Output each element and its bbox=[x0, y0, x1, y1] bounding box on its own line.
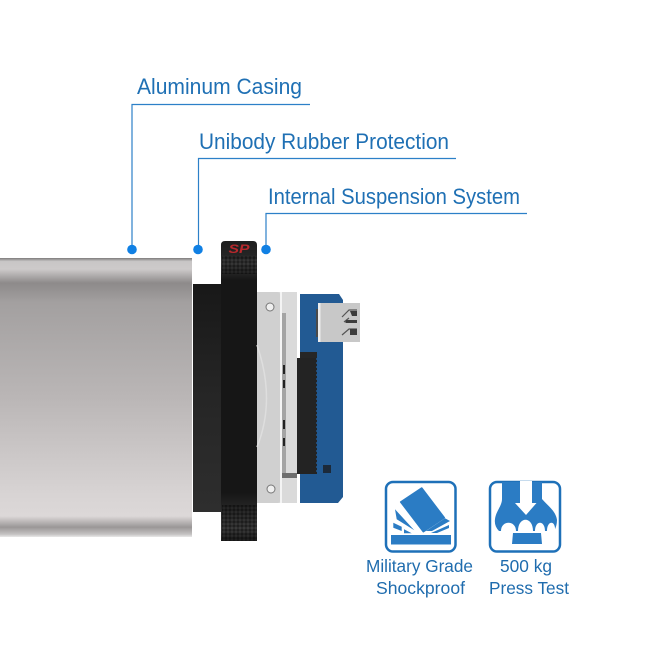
aluminum casing bbox=[0, 258, 192, 537]
black inner rubber band bbox=[193, 284, 222, 512]
label: Internal Suspension System: Internal Suspension System bbox=[268, 184, 520, 209]
screws bbox=[266, 303, 274, 311]
caption: 500 kg Press Test: 500 kg bbox=[500, 556, 552, 576]
label: Unibody Rubber Protection bbox=[193, 129, 456, 254]
icon: military grade shockproof bbox=[386, 482, 456, 552]
caption: Military Grade Shockproof: Shockproof bbox=[376, 578, 465, 598]
label: Aluminum Casing: Aluminum Casing bbox=[137, 74, 302, 99]
label: Unibody Rubber Protection: Unibody Rubber Protection bbox=[199, 129, 449, 154]
caption: 500 kg Press Test: Press Test bbox=[489, 578, 569, 598]
SP logo: SP bbox=[228, 242, 251, 256]
caption: Military Grade Shockproof: Military Grade bbox=[366, 556, 473, 576]
unibody rubber protection ring bbox=[221, 241, 257, 541]
icon: 500 kg press test bbox=[490, 481, 560, 552]
USB port bbox=[316, 303, 360, 342]
caption: Military Grade Shockproof bbox=[366, 556, 473, 598]
label: Internal Suspension System bbox=[261, 184, 527, 254]
blue circuit board bbox=[300, 294, 343, 503]
SATA connector bbox=[297, 352, 331, 474]
hard drive bbox=[257, 292, 297, 503]
caption: 500 kg Press Test bbox=[489, 556, 569, 598]
label: Aluminum Casing bbox=[127, 74, 310, 254]
